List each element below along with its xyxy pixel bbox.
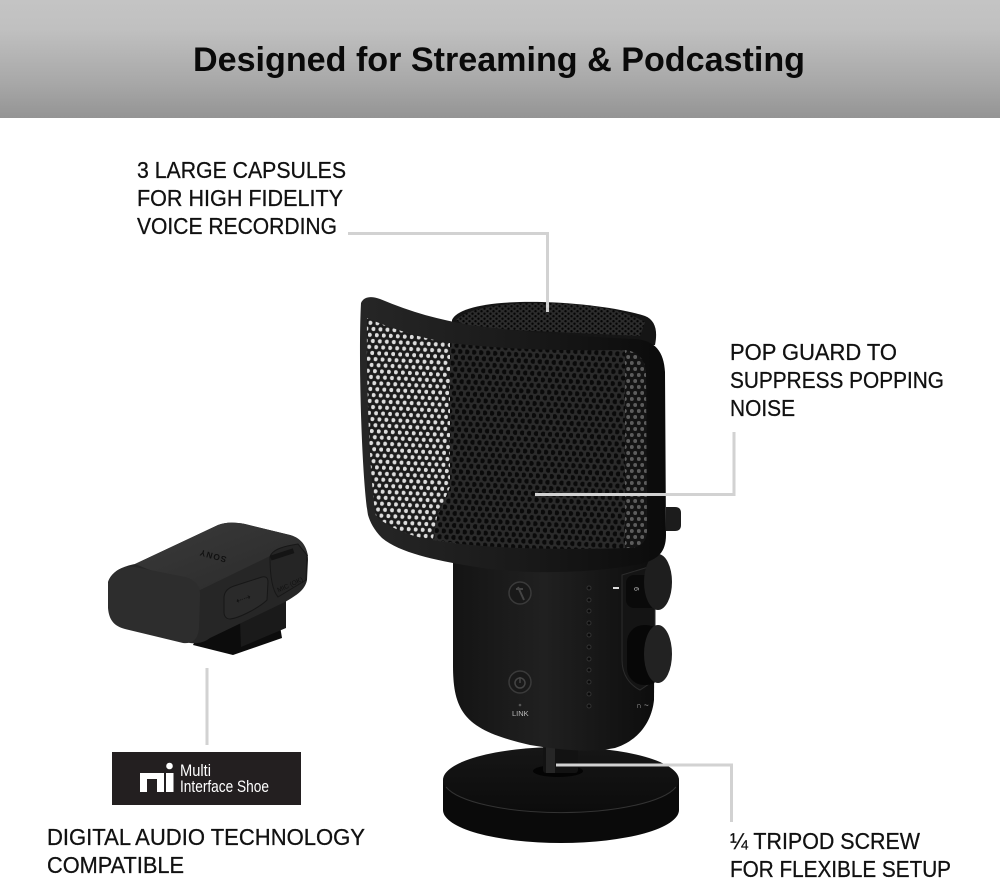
power button (509, 671, 531, 693)
text block: tripod screw: ¼ TRIPOD SCREW (730, 828, 920, 854)
usb door: ⇠⇢ (235, 591, 253, 606)
microphone base (443, 745, 679, 843)
callout: shoe leader line (206, 668, 208, 745)
text block: capsules: FOR HIGH FIDELITY (137, 185, 343, 211)
LINK label: LINK (512, 709, 529, 718)
text block: pop guard: NOISE (730, 395, 795, 421)
control recess (622, 565, 655, 690)
gain dial: 6 (632, 587, 639, 591)
badge text: Multi (180, 761, 211, 780)
pop guard mesh (360, 310, 650, 555)
text block: digital audio: COMPATIBLE (47, 852, 184, 878)
header banner (0, 0, 1000, 118)
shoe foot (193, 612, 282, 655)
top capsule grille (452, 302, 656, 345)
mic door (270, 544, 307, 597)
callout: pop guard leader line (535, 432, 734, 494)
transmitter front face (108, 567, 200, 643)
text block: digital audio (47, 824, 365, 878)
text block: capsules: 3 LARGE CAPSULES (137, 157, 346, 183)
SONY logo: SONY (198, 547, 228, 565)
title: Designed for Streaming & Podcasting (193, 41, 805, 79)
text block: pop guard: POP GUARD TO (730, 339, 897, 365)
transmitter top face (135, 523, 308, 590)
text block: digital audio: DIGITAL AUDIO TECHNOLOGY (47, 824, 365, 850)
Multi Interface Shoe badge: Interface Shoe (180, 777, 269, 796)
text block: capsules (137, 157, 346, 239)
ni logo icon (140, 763, 174, 792)
usb door (224, 577, 268, 619)
gain dial (626, 554, 672, 610)
text block: pop guard (730, 339, 944, 421)
transmitter with shoe adapter (108, 523, 308, 655)
headphone mark: ∩ ~ (636, 701, 649, 710)
microphone illustration (360, 297, 681, 843)
LED column (587, 586, 591, 708)
microphone body (453, 554, 672, 751)
callout: capsules leader line (348, 234, 548, 312)
mute button (509, 582, 531, 604)
text block: capsules: VOICE RECORDING (137, 213, 337, 239)
transmitter body (108, 523, 308, 643)
text block: tripod screw (730, 828, 951, 879)
pop guard frame (360, 297, 666, 572)
MIC label: MIC (OK) (276, 576, 304, 594)
Multi Interface Shoe badge (112, 752, 301, 805)
volume dial (627, 625, 672, 685)
callout: tripod leader line (556, 765, 732, 822)
text block: pop guard: SUPPRESS POPPING (730, 367, 944, 393)
pop guard (360, 297, 681, 572)
